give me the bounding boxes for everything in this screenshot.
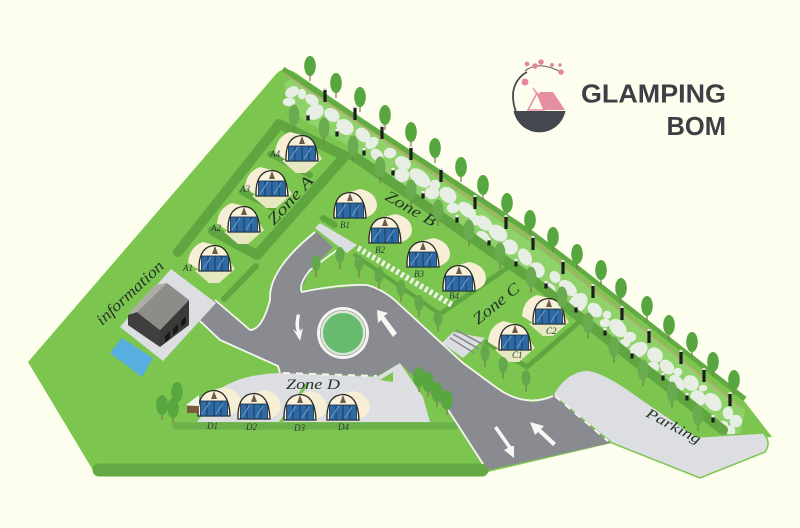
dome A2 — [210, 203, 264, 244]
zone labels — [264, 172, 524, 393]
dome D2: D2 — [245, 422, 257, 432]
dome B3 — [407, 238, 450, 279]
dome A4 — [269, 132, 322, 173]
arrows — [293, 314, 303, 341]
small shed beside D1 — [186, 395, 199, 413]
dome A4: A4 — [269, 149, 280, 159]
zone D hedge — [176, 422, 455, 430]
dome B1 — [334, 189, 377, 230]
dome A3: A3 — [239, 184, 250, 194]
dome C1: C1 — [512, 350, 523, 360]
dome B2: B2 — [375, 245, 385, 255]
building — [128, 312, 160, 347]
zone A outer hedge — [178, 124, 345, 255]
road — [200, 232, 610, 470]
pad — [120, 269, 216, 361]
dome A3 — [239, 167, 292, 208]
logo wordmark — [581, 80, 726, 141]
dashed lines — [283, 373, 608, 441]
dome B4: B4 — [449, 291, 459, 301]
label: Zone A: Zone A — [264, 172, 317, 229]
dome A1: A1 — [182, 263, 193, 273]
lamps — [306, 88, 732, 422]
zone B drive pad and crosswalk — [315, 223, 452, 305]
label: Zone B: Zone B — [382, 188, 439, 231]
dome A2: A2 — [210, 223, 221, 233]
zone A inner hedges — [242, 154, 310, 208]
dome D4 — [327, 391, 370, 432]
stone wall band — [283, 69, 745, 436]
dome B3: B3 — [414, 269, 424, 279]
logo wordmark: BOM — [666, 113, 726, 141]
zone B domes — [334, 189, 486, 301]
zone C side pad — [442, 330, 485, 358]
fence — [285, 74, 740, 407]
parking lot — [553, 370, 768, 478]
stones — [284, 86, 741, 436]
small green patch in zone D yard — [380, 372, 393, 382]
logo wordmark: GLAMPING — [581, 80, 726, 108]
label: Parking: Parking — [642, 406, 703, 448]
dome D3 — [284, 391, 327, 433]
zone C hedges — [443, 268, 578, 367]
small trees — [156, 247, 531, 423]
row of inner trees — [289, 104, 703, 431]
small hedge by information — [224, 266, 256, 299]
dome D3: D3 — [293, 423, 305, 433]
dome D2 — [238, 390, 281, 432]
label: information: information — [93, 258, 168, 329]
short B1 hedge — [323, 218, 335, 225]
hedges — [99, 124, 723, 470]
pool — [110, 338, 153, 377]
dome D1 — [198, 387, 241, 431]
drive hedge — [355, 255, 437, 312]
dome C2: C2 — [546, 326, 557, 336]
dome D4: D4 — [337, 422, 349, 432]
road edge lines — [200, 232, 553, 464]
zone C domes — [488, 295, 569, 362]
zone B lower-edge hedge and upper hedge — [352, 155, 723, 430]
label: Zone D: Zone D — [286, 377, 340, 393]
information building — [93, 258, 216, 377]
zone A domes — [182, 132, 322, 283]
dome B1: B1 — [340, 220, 350, 230]
bottom hedge — [99, 464, 482, 476]
label: Zone C: Zone C — [470, 280, 524, 328]
dome A1 — [182, 242, 235, 283]
dome B4 — [443, 262, 486, 301]
logo icon: tent in circle with blossom branch — [513, 59, 566, 132]
top hedge strip — [283, 69, 745, 399]
zone D domes — [198, 387, 370, 433]
green site ground — [28, 70, 772, 472]
logo — [513, 59, 726, 141]
row of tall trees — [304, 56, 740, 395]
dome D1: D1 — [206, 421, 218, 431]
dome B2 — [369, 214, 412, 255]
zone D gravel yard — [197, 363, 430, 423]
roundabout — [317, 307, 369, 359]
